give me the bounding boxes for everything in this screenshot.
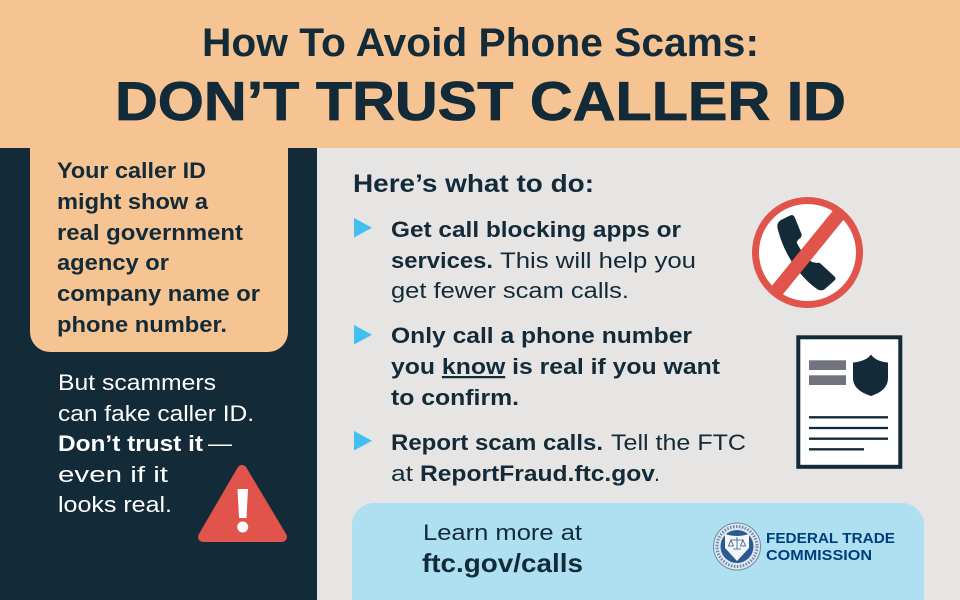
- list item: report scam calls: Report scam calls.: [391, 430, 603, 455]
- title line 2: DON’T TRUST CALLER ID: [115, 70, 846, 132]
- text block: scammers can fake caller id: But scammers: [58, 370, 216, 395]
- callout: caller id warning: phone number.: [57, 312, 227, 337]
- text block: scammers can fake caller id: can fake caller ID.: [58, 401, 254, 426]
- panel: left dark column: [0, 148, 317, 600]
- callout: caller id warning: company name or: [57, 281, 260, 306]
- text block: scammers can fake caller id: Don’t trust it: [58, 431, 204, 456]
- icon: warning triangle: [203, 470, 282, 537]
- logo text: federal trade commission: COMMISSION: [766, 547, 872, 564]
- text block: scammers can fake caller id: [58, 370, 254, 517]
- list item: report scam calls: ReportFraud.ftc.gov: [420, 461, 656, 486]
- panel: learn more: Learn more at: [423, 520, 583, 545]
- panel: learn more: ftc.gov/calls: [422, 548, 583, 578]
- callout: caller id warning: agency or: [57, 250, 169, 275]
- icon: blocked phone: [756, 200, 860, 304]
- list item: report scam calls: at: [391, 461, 414, 486]
- list item: report scam calls: [354, 430, 746, 486]
- heading: here's what to do: Here’s what to do:: [353, 170, 594, 198]
- logo text: federal trade commission: [766, 530, 895, 564]
- list item: report scam calls: .: [654, 461, 660, 486]
- list item: report scam calls: Tell the FTC: [611, 430, 746, 455]
- logo text: federal trade commission: FEDERAL TRADE: [766, 530, 895, 547]
- list item: call blocking: Get call blocking apps or: [391, 217, 681, 242]
- icon: document with shield: [798, 337, 900, 467]
- list item: only call known number: [354, 323, 721, 410]
- list item: only call known number: to confirm.: [391, 385, 519, 410]
- text block: scammers can fake caller id: looks real.: [58, 492, 172, 517]
- list item: call blocking: [354, 217, 696, 303]
- text block: scammers can fake caller id: —: [208, 431, 233, 456]
- list item: call blocking: get fewer scam calls.: [391, 278, 629, 303]
- list item: only call known number: you know is real if you want: [391, 354, 721, 379]
- callout: caller id warning: Your caller ID: [57, 158, 206, 183]
- panel: right background: [317, 148, 960, 600]
- callout: caller id warning: might show a: [57, 189, 209, 214]
- callout: caller id warning: real government: [57, 220, 244, 245]
- list item: call blocking: services.: [391, 248, 493, 273]
- title line 1: How To Avoid Phone Scams:: [202, 21, 759, 65]
- panel: learn more: [352, 503, 924, 600]
- header band: [0, 0, 960, 148]
- callout: caller id warning: [30, 148, 288, 352]
- logo: FTC seal: [714, 523, 760, 570]
- list item: only call known number: Only call a phone number: [391, 323, 692, 348]
- text block: scammers can fake caller id: even if it: [58, 462, 169, 487]
- list item: call blocking: This will help you: [500, 248, 696, 273]
